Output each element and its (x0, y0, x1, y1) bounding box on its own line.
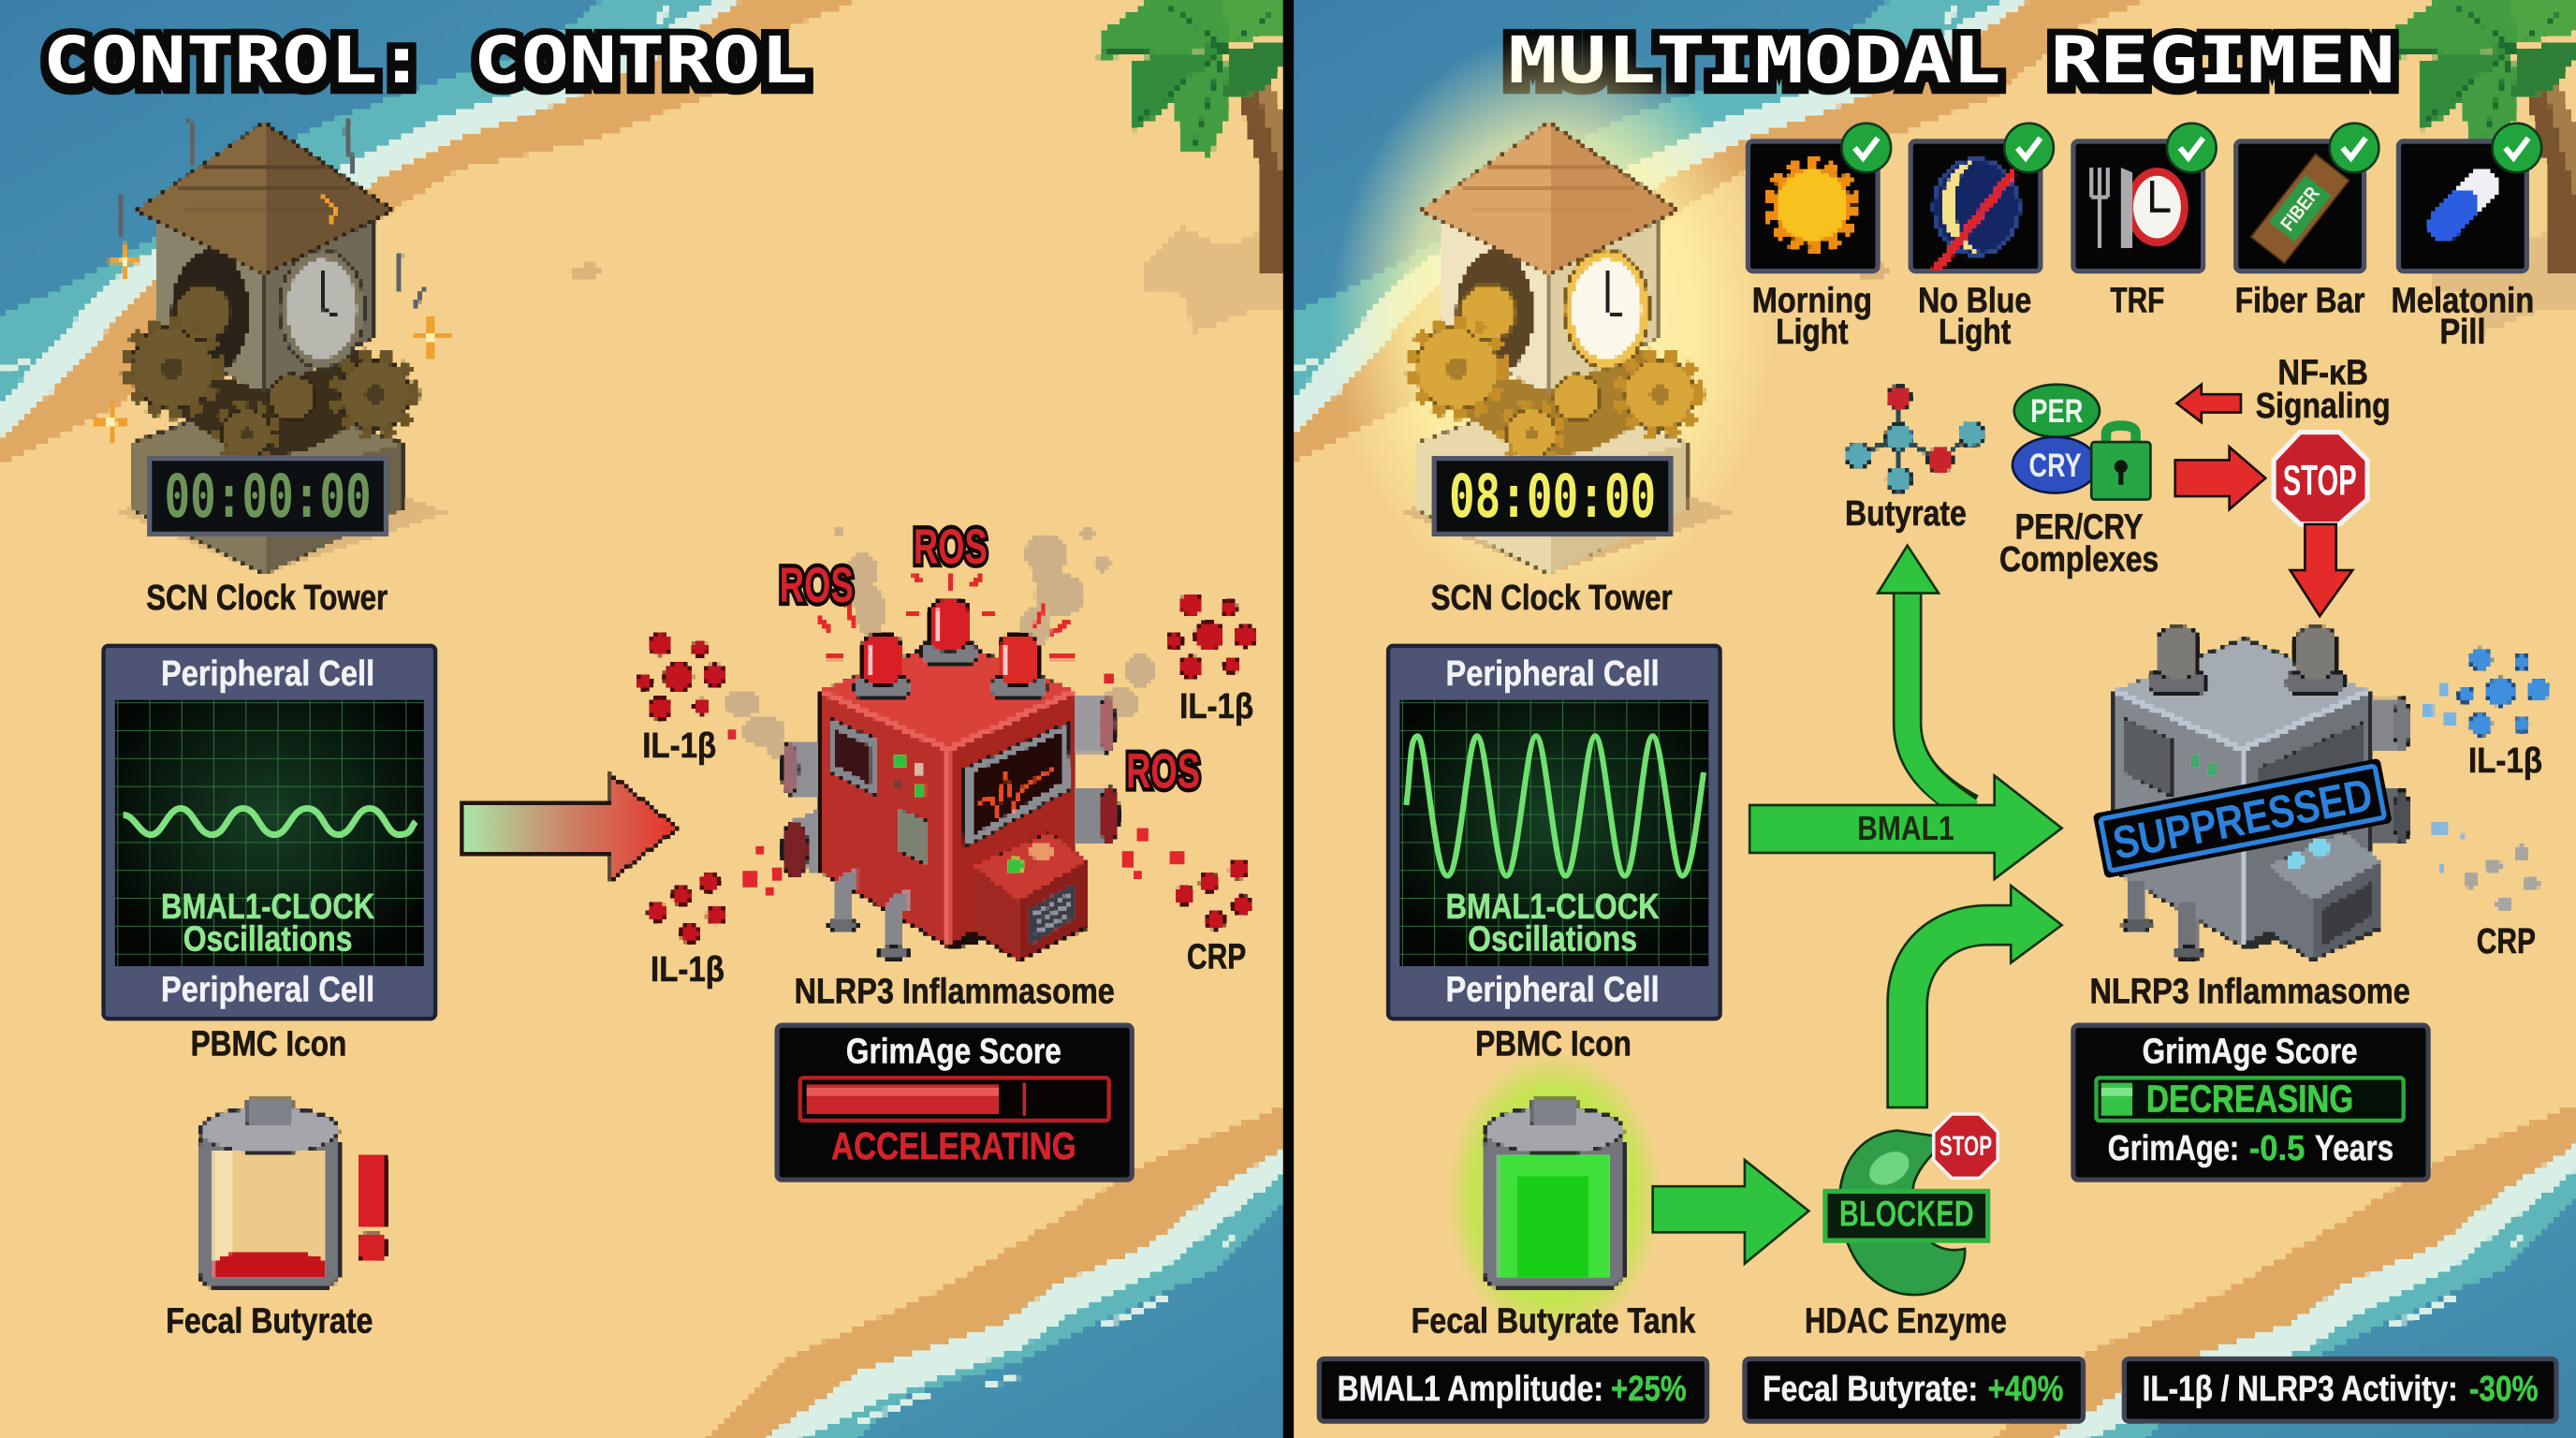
label: PBMC icon right: PBMC Icon (1475, 1024, 1632, 1064)
intervention card: morning light (1748, 124, 1891, 271)
label: fecal butyrate tank: Fecal Butyrate Tank (1412, 1300, 1696, 1340)
smoke (724, 526, 1155, 757)
label: NF-κB signaling: Signaling (2256, 386, 2391, 425)
stat: IL-1β NLRP3 activity: IL-1β / NLRP3 Activity: (2143, 1369, 2458, 1408)
stat: IL-1β NLRP3 activity: -30% (2469, 1369, 2539, 1408)
arrow: stop down (2291, 524, 2352, 616)
title: control: CONTROL: CONTROL (43, 23, 809, 98)
legs (842, 879, 909, 953)
particles: IL-1β blue (2422, 648, 2549, 735)
icon: empty butyrate tank (198, 1099, 340, 1288)
grimage value: Years (2315, 1128, 2393, 1167)
dead sirens (2149, 627, 2345, 694)
pipes (782, 697, 1119, 877)
icon: full butyrate tank (1445, 1051, 1662, 1341)
icon: broken SCN clock tower (95, 118, 450, 574)
digital clock: 00:00:00 (165, 462, 372, 531)
label: BMAL1: BMAL1 (1857, 809, 1954, 847)
stat: BMAL1 amplitude: +25% (1611, 1369, 1687, 1408)
arrow: BMAL1 branch up (1908, 588, 1971, 812)
pixel layer: control background (0, 0, 1288, 1438)
grimage value: -0.5 (2249, 1128, 2305, 1167)
icon: fork knife clock (2091, 168, 2188, 248)
badge: blocked: BLOCKED (1839, 1194, 1974, 1234)
stat: fecal butyrate: +40% (1988, 1369, 2063, 1408)
label: ROS top: ROS (914, 520, 988, 575)
alarm rays (818, 572, 1075, 657)
icon: check (2167, 124, 2217, 172)
label: IL-1β upper left: IL-1β (642, 726, 716, 765)
label: no blue light (1918, 280, 2031, 351)
label: NF-κB signaling: NF-κB (2277, 353, 2368, 392)
icon: healthy SCN clock tower (1331, 33, 1775, 608)
icon: butyrate molecule (1846, 386, 1983, 492)
icon: moon (1934, 159, 2019, 271)
icon: small stop sign (1934, 1114, 1998, 1178)
label: ROS left: ROS (780, 558, 854, 613)
particles: CRP (1176, 860, 1251, 930)
label: NLRP3 inflammasome right: NLRP3 Inflammasome (2089, 971, 2410, 1010)
panel: peripheral cell monitor (regimen): Oscillations (1468, 918, 1637, 958)
icon: PER CRY complex with lock (2012, 385, 2150, 500)
progress bar: DECREASING (2146, 1077, 2353, 1120)
intervention card: fiber bar (2236, 124, 2378, 271)
icon: PER CRY complex with lock: PER (2030, 393, 2083, 430)
arrow: NF-κB left (2177, 385, 2241, 422)
icon: PER CRY complex with lock: CRY (2029, 448, 2082, 484)
label: butyrate: Butyrate (1845, 493, 1967, 533)
label: fecal butyrate: Fecal Butyrate (166, 1300, 373, 1340)
divider (1283, 0, 1294, 1438)
label: TRF: TRF (2110, 280, 2164, 319)
panel: GrimAge accelerating: GrimAge Score (846, 1032, 1061, 1071)
badge: blocked (1825, 1191, 1988, 1240)
panel: peripheral cell monitor (regimen): Peripheral Cell (1445, 653, 1660, 693)
label: CRP: CRP (1187, 937, 1246, 976)
icon: HDAC enzyme blocked (1825, 1114, 1998, 1295)
icon: fiber bar (2251, 154, 2349, 263)
panel: peripheral cell monitor (regimen): BMAL1-CLOCK (1445, 887, 1660, 926)
title: multimodal regimen: MULTIMODAL REGIMEN (1508, 23, 2395, 98)
panel: GrimAge decreasing: GrimAge Score (2143, 1032, 2358, 1071)
icon: sun (1771, 165, 1853, 246)
intervention card: melatonin pill (2398, 124, 2541, 271)
particles: IL-1β lower left (648, 873, 725, 943)
sparks: red debris (728, 674, 1184, 896)
stat: fecal butyrate: Fecal Butyrate: (1763, 1369, 1978, 1408)
arrow: tank to HDAC (1653, 1160, 1808, 1264)
label: SCN clock tower: SCN Clock Tower (146, 578, 388, 617)
console (973, 831, 1088, 961)
label: morning light: Morning (1752, 280, 1872, 319)
progress bar (800, 1078, 1109, 1121)
panel: control beach background (0, 0, 1288, 1438)
label: IL-1β upper right: IL-1β (1179, 686, 1253, 726)
label: melatonin pill: Pill (2439, 312, 2485, 351)
banner: suppressed: SUPPRESSED (2109, 770, 2377, 870)
icon: fiber bar: FIBER (2276, 183, 2324, 235)
arrow: BMAL1 branch outline (1908, 588, 1971, 809)
label: PER/CRY complexes: PER/CRY (2015, 507, 2144, 547)
arrow head: branch up (1878, 546, 1939, 594)
icon: suppressed inflammasome (2093, 627, 2410, 961)
label: morning light: Light (1776, 312, 1849, 351)
digital clock: 08:00:00 (1449, 462, 1656, 531)
intervention card: no blue light (1910, 124, 2054, 271)
panel: peripheral cell monitor (control) (104, 646, 435, 1019)
icon: capsule (2445, 185, 2482, 225)
label: SCN clock tower right: SCN Clock Tower (1431, 578, 1673, 617)
label: IL-1β right: IL-1β (2468, 741, 2542, 780)
icon: check (2004, 124, 2054, 172)
icon: overheated NLRP3 inflammasome (724, 526, 1155, 961)
panel: peripheral cell monitor (control): Peripheral Cell (161, 970, 374, 1009)
digital clock (150, 459, 386, 534)
label: CRP right: CRP (2477, 921, 2536, 961)
sirens (855, 600, 1046, 698)
panel: GrimAge accelerating (777, 1025, 1132, 1180)
label: PER/CRY complexes: Complexes (1999, 539, 2159, 579)
digital clock (1434, 459, 1671, 534)
arrow: HDAC to inflammasome (1888, 886, 2062, 1108)
label: NLRP3 inflammasome: NLRP3 Inflammasome (795, 971, 1115, 1010)
particles: IL-1β upper right (1167, 594, 1256, 678)
label: melatonin pill: Melatonin (2392, 280, 2534, 319)
icon: check (2492, 124, 2541, 172)
label: morning light (1752, 280, 1872, 351)
screen (962, 723, 1071, 848)
label: no blue light: Light (1939, 312, 2012, 351)
panel: GrimAge decreasing (2073, 1025, 2428, 1180)
stat: IL-1β NLRP3 activity (2124, 1358, 2556, 1421)
left detail panel (829, 718, 877, 797)
label: fiber bar: Fiber Bar (2235, 280, 2365, 319)
arrow: green to red (463, 775, 677, 879)
panel: peripheral cell monitor (regimen): Peripheral Cell (1445, 970, 1660, 1009)
arrow: BMAL1 (1749, 775, 2062, 879)
icon: check (1841, 124, 1891, 172)
label: IL-1β lower left: IL-1β (651, 949, 724, 989)
panel: GrimAge accelerating: ACCELERATING (831, 1124, 1076, 1167)
particles: IL-1β upper left (637, 634, 725, 719)
panel: peripheral cell monitor (control): Oscillations (183, 918, 352, 958)
stat: fecal butyrate (1745, 1358, 2083, 1421)
icon: stop sign: STOP (2283, 456, 2357, 504)
label: melatonin pill (2392, 280, 2534, 351)
stat: BMAL1 amplitude (1319, 1358, 1707, 1421)
icon: check (2330, 124, 2378, 172)
particles: CRP grey (2433, 822, 2539, 911)
icon: small stop sign: STOP (1939, 1131, 1992, 1162)
panel: peripheral cell monitor (control): BMAL1-CLOCK (161, 887, 374, 926)
arrow: to stop (2175, 447, 2265, 509)
label: no blue light: No Blue (1918, 280, 2031, 319)
intervention card: TRF (2073, 124, 2217, 271)
label: HDAC enzyme: HDAC Enzyme (1805, 1300, 2007, 1340)
label: ROS right: ROS (1126, 744, 1200, 800)
waveform: strong oscillation (1406, 736, 1704, 875)
panel: regimen beach background (1288, 0, 2576, 1438)
grimage value: GrimAge: (2108, 1128, 2239, 1167)
icon: exclamation mark (359, 1155, 386, 1260)
stat: BMAL1 amplitude: BMAL1 Amplitude: (1338, 1369, 1603, 1408)
label: PER/CRY complexes (1999, 507, 2159, 579)
panel: peripheral cell monitor (control): Peripheral Cell (161, 653, 374, 693)
pixel layer: regimen background (1288, 0, 2576, 1438)
panel: peripheral cell monitor (regimen) (1388, 646, 1720, 1019)
grimage value (2108, 1128, 2393, 1167)
waveform: weak oscillation (124, 809, 416, 835)
label: PBMC icon: PBMC Icon (191, 1024, 346, 1064)
icon: stop sign (2274, 433, 2367, 524)
label: NF-κB signaling (2256, 353, 2391, 425)
